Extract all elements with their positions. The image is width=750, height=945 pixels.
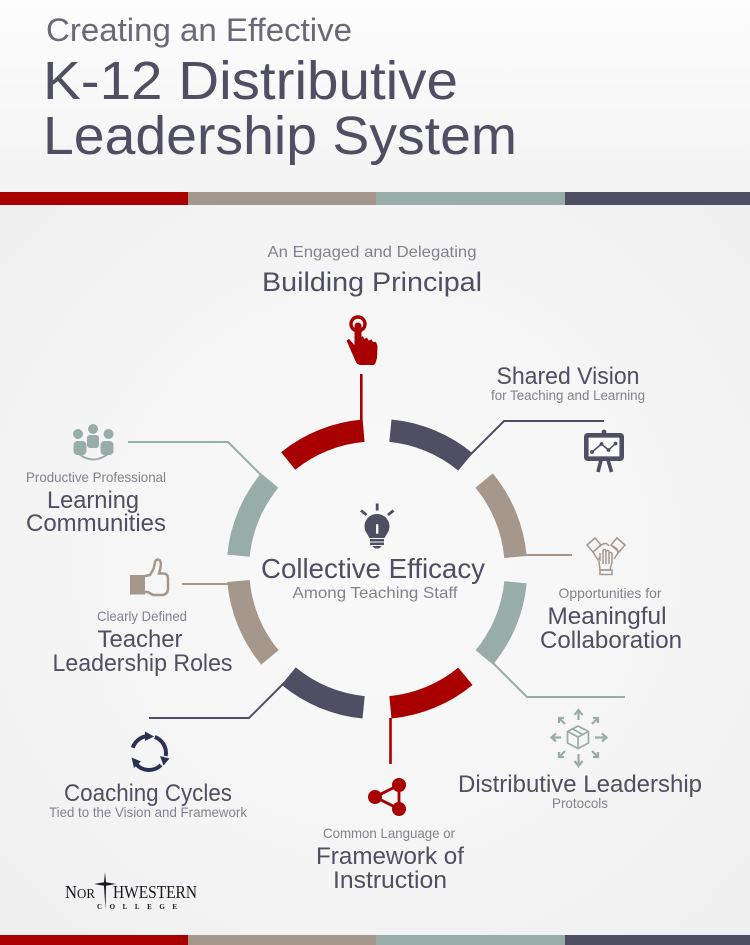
- centre label: collective efficacy: [261, 553, 485, 602]
- icon: people group: [73, 424, 114, 460]
- icon: light bulb: [360, 504, 394, 548]
- coaching cycles label: Coaching Cycles: [64, 780, 232, 807]
- learning communities label: Productive Professional: [26, 469, 166, 485]
- icon: pointing hand: [346, 317, 378, 365]
- learning communities label: [26, 469, 166, 537]
- coaching cycles label: [49, 780, 248, 820]
- icon: share nodes: [368, 778, 406, 816]
- distributive leadership label: Protocols: [552, 795, 608, 811]
- centre label: collective efficacy: Collective Efficacy: [261, 553, 485, 584]
- centre label: collective efficacy: Among Teaching Staff: [292, 585, 458, 602]
- top colour bar: [0, 192, 750, 205]
- title: K-12 Distributive: [43, 51, 458, 111]
- opportunities label: [540, 585, 682, 654]
- learning communities label: Learning: [47, 487, 139, 514]
- page background: [0, 205, 750, 935]
- logo: northwestern college: NOR: [65, 882, 96, 902]
- shared vision label: for Teaching and Learning: [491, 387, 645, 403]
- ring of eight segments: [238, 431, 516, 707]
- icon: box with outward arrows: [552, 710, 606, 766]
- logo: northwestern college: [65, 872, 197, 911]
- icon: presentation board: [586, 430, 622, 472]
- coaching cycles label: Tied to the Vision and Framework: [49, 804, 248, 820]
- icon: joined hands: [587, 538, 625, 574]
- learning communities label: Communities: [26, 510, 166, 537]
- common language label: Framework of: [316, 843, 464, 870]
- header panel: [0, 0, 750, 192]
- icon: cycle arrows: [132, 732, 170, 770]
- top label: building principal: Building Principal: [262, 267, 482, 297]
- shared vision label: [491, 363, 645, 403]
- teacher leadership label: Clearly Defined: [97, 608, 187, 624]
- top label: building principal: [262, 244, 482, 297]
- shared vision label: Shared Vision: [496, 363, 640, 390]
- distributive leadership label: [458, 771, 702, 811]
- opportunities label: Opportunities for: [558, 585, 662, 601]
- top label: building principal: An Engaged and Delegating: [268, 244, 476, 261]
- common language label: Instruction: [333, 867, 447, 894]
- common language label: Common Language or: [323, 825, 455, 841]
- connector lines: [128, 374, 625, 764]
- teacher leadership label: [52, 608, 232, 677]
- logo: northwestern college: COLLEGE: [97, 903, 177, 911]
- teacher leadership label: Leadership Roles: [52, 650, 232, 677]
- common language label: [316, 825, 464, 894]
- opportunities label: Collaboration: [540, 627, 682, 654]
- logo: northwestern college: HWESTERN: [113, 882, 197, 902]
- opportunities label: Meaningful: [548, 603, 666, 630]
- icon: thumbs up: [130, 560, 168, 595]
- teacher leadership label: Teacher: [98, 626, 182, 653]
- bottom colour bar: [0, 935, 750, 945]
- title: Leadership System: [43, 106, 517, 166]
- title: [43, 12, 517, 166]
- distributive leadership label: Distributive Leadership: [458, 771, 702, 798]
- title: Creating an Effective: [46, 12, 352, 48]
